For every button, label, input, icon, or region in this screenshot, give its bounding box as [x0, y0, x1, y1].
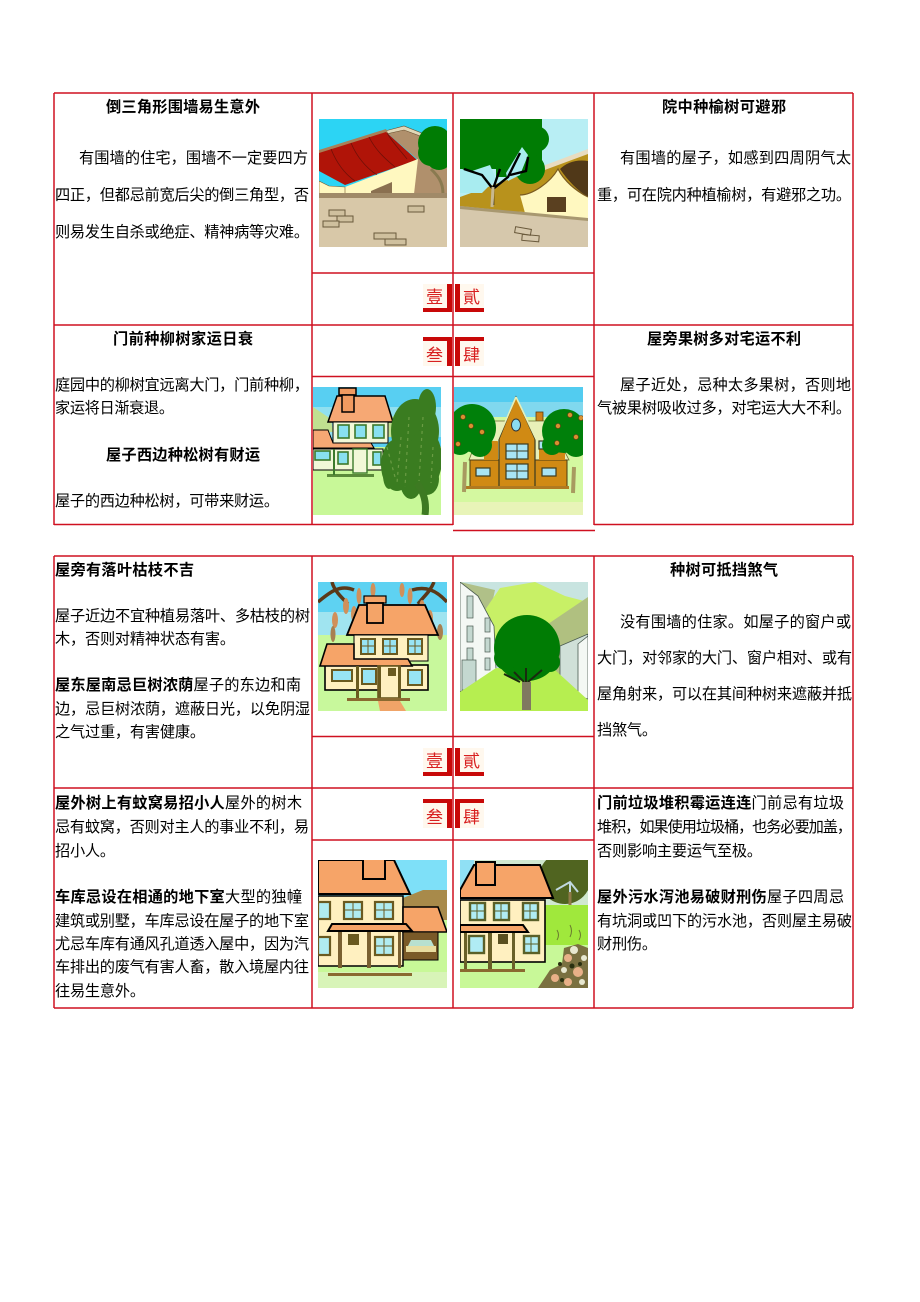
- panel: garbage and sewage text: 有坑洞或凹下的污水池，否则屋主易破: [597, 913, 852, 930]
- panel: garbage and sewage text: 否则影响主要运气至极。: [597, 843, 762, 860]
- panel: inverted triangle wall text: 有围墙的住宅，围墙不一定要四方: [79, 150, 308, 167]
- illustration: house with willow: [313, 387, 441, 515]
- panel: ant nest and garage text: 建筑或别墅，车库忌设在屋子的地下室: [55, 913, 309, 930]
- seal: numerals one and two, table 2: 壹: [426, 752, 443, 771]
- panel: inverted triangle wall text: 倒三角形围墙易生意外: [106, 98, 260, 116]
- seal: numerals one and two, table 1: 壹: [426, 288, 443, 307]
- illustration: house with withered branches: [318, 582, 447, 711]
- panel: ant nest and garage text: 屋外树上有蚊窝易招小人屋外的树木: [55, 794, 302, 812]
- panel: inverted triangle wall text: 四正，但都忌前宽后尖的倒三角型，否: [55, 187, 309, 204]
- panel: willow and pine text: 屋子西边种松树有财运: [106, 446, 260, 464]
- illustration: elm tree in courtyard: [460, 119, 588, 247]
- panel: tree blocks sha qi text: 大门，对邻家的大门、窗户相对、或有: [597, 649, 852, 667]
- panel: elm tree text: 重，可在院内种植榆树，有避邪之功。: [597, 186, 851, 204]
- panel: ant nest and garage text: 尤忌车库有通风孔道透入屋中，因为汽: [55, 936, 309, 953]
- panel: inverted triangle wall text: [55, 98, 309, 241]
- seal: numerals one and two, table 1: [423, 284, 484, 312]
- panel: willow and pine text: 家运将日渐衰退。: [55, 400, 174, 417]
- panel: inverted triangle wall text: 则易发生自杀或绝症、精神病等灾难。: [55, 223, 309, 241]
- panel: willow and pine text: 门前种柳树家运日衰: [113, 330, 253, 348]
- seal: numerals one and two, table 2: 貳: [463, 752, 480, 771]
- panel: fruit trees text: 气被果树吸收过多，对宅运大大不利。: [597, 400, 851, 417]
- panel: tree blocks sha qi text: 屋角射来，可以在其间种树来遮蔽并抵: [597, 686, 852, 703]
- panel: ant nest and garage text: 车库忌设在相通的地下室大型的独幢: [55, 888, 302, 906]
- panel: fruit trees text: [597, 330, 851, 417]
- panel: withered branches text: 边，忌巨树浓荫，遮蔽日光，以免阴湿: [55, 701, 310, 718]
- panel: tree blocks sha qi text: 种树可抵挡煞气: [670, 561, 778, 579]
- seal: numerals one and two, table 2: [423, 748, 484, 776]
- panel: garbage and sewage text: 门前垃圾堆积霉运连连门前忌有垃圾: [597, 794, 844, 812]
- illustration: tree between buildings: [460, 582, 588, 711]
- panel: garbage and sewage text: 堆积，如果使用垃圾桶，也务必要加盖，: [597, 819, 852, 836]
- panel: fruit trees text: 屋旁果树多对宅运不利: [647, 330, 801, 348]
- seal: numerals three and four, table 1: 肆: [463, 346, 480, 365]
- seal: numerals one and two, table 1: 貳: [463, 288, 480, 307]
- panel: ant nest and garage text: [55, 794, 309, 1000]
- panel: tree blocks sha qi text: 没有围墙的住家。如屋子的窗户或: [620, 613, 851, 631]
- panel: willow and pine text: 屋子的西边种松树，可带来财运。: [55, 493, 279, 510]
- panel: tree blocks sha qi text: [597, 561, 852, 739]
- panel: willow and pine text: [55, 330, 309, 510]
- panel: garbage and sewage text: 财刑伤。: [597, 936, 657, 953]
- seal: numerals three and four, table 2: 叁: [426, 808, 443, 827]
- panel: ant nest and garage text: 忌有蚊窝，否则对主人的事业不利，易: [55, 818, 309, 836]
- panel: withered branches text: 屋子近边不宜种植易落叶、多枯枝的树: [55, 608, 310, 625]
- panel: ant nest and garage text: 招小人。: [55, 843, 115, 860]
- panel: withered branches text: [55, 561, 310, 741]
- panel: willow and pine text: 庭园中的柳树宜远离大门，门前种柳，: [55, 377, 309, 394]
- panel: fruit trees text: 屋子近处，忌种太多果树，否则地: [620, 377, 851, 394]
- illustration: house with garbage heap: [460, 860, 588, 988]
- panel: withered branches text: 木，否则对精神状态有害。: [55, 631, 235, 648]
- panel: withered branches text: 屋东屋南忌巨树浓荫屋子的东边和南: [55, 676, 301, 694]
- illustration: house with garage: [318, 860, 447, 988]
- panel: withered branches text: 屋旁有落叶枯枝不吉: [55, 561, 194, 579]
- panel: withered branches text: 之气过重，有害健康。: [55, 724, 205, 741]
- panel: ant nest and garage text: 往易生意外。: [55, 982, 145, 1000]
- panel: ant nest and garage text: 车排出的废气有害人畜，散入境屋内往: [55, 958, 309, 976]
- seal: numerals three and four, table 1: [423, 337, 484, 366]
- seal: numerals three and four, table 2: 肆: [463, 808, 480, 827]
- panel: elm tree text: [597, 98, 851, 204]
- panel: garbage and sewage text: [597, 794, 852, 953]
- panel: garbage and sewage text: 屋外污水泻池易破财刑伤屋子四周忌: [597, 888, 844, 906]
- illustration: triangular wall house: [319, 119, 447, 247]
- panel: elm tree text: 有围墙的屋子，如感到四周阴气太: [620, 150, 851, 167]
- seal: numerals three and four, table 2: [423, 799, 484, 828]
- panel: tree blocks sha qi text: 挡煞气。: [597, 722, 657, 739]
- panel: elm tree text: 院中种榆树可避邪: [662, 98, 786, 116]
- illustration: house with fruit trees: [454, 387, 583, 515]
- seal: numerals three and four, table 1: 叁: [426, 346, 443, 365]
